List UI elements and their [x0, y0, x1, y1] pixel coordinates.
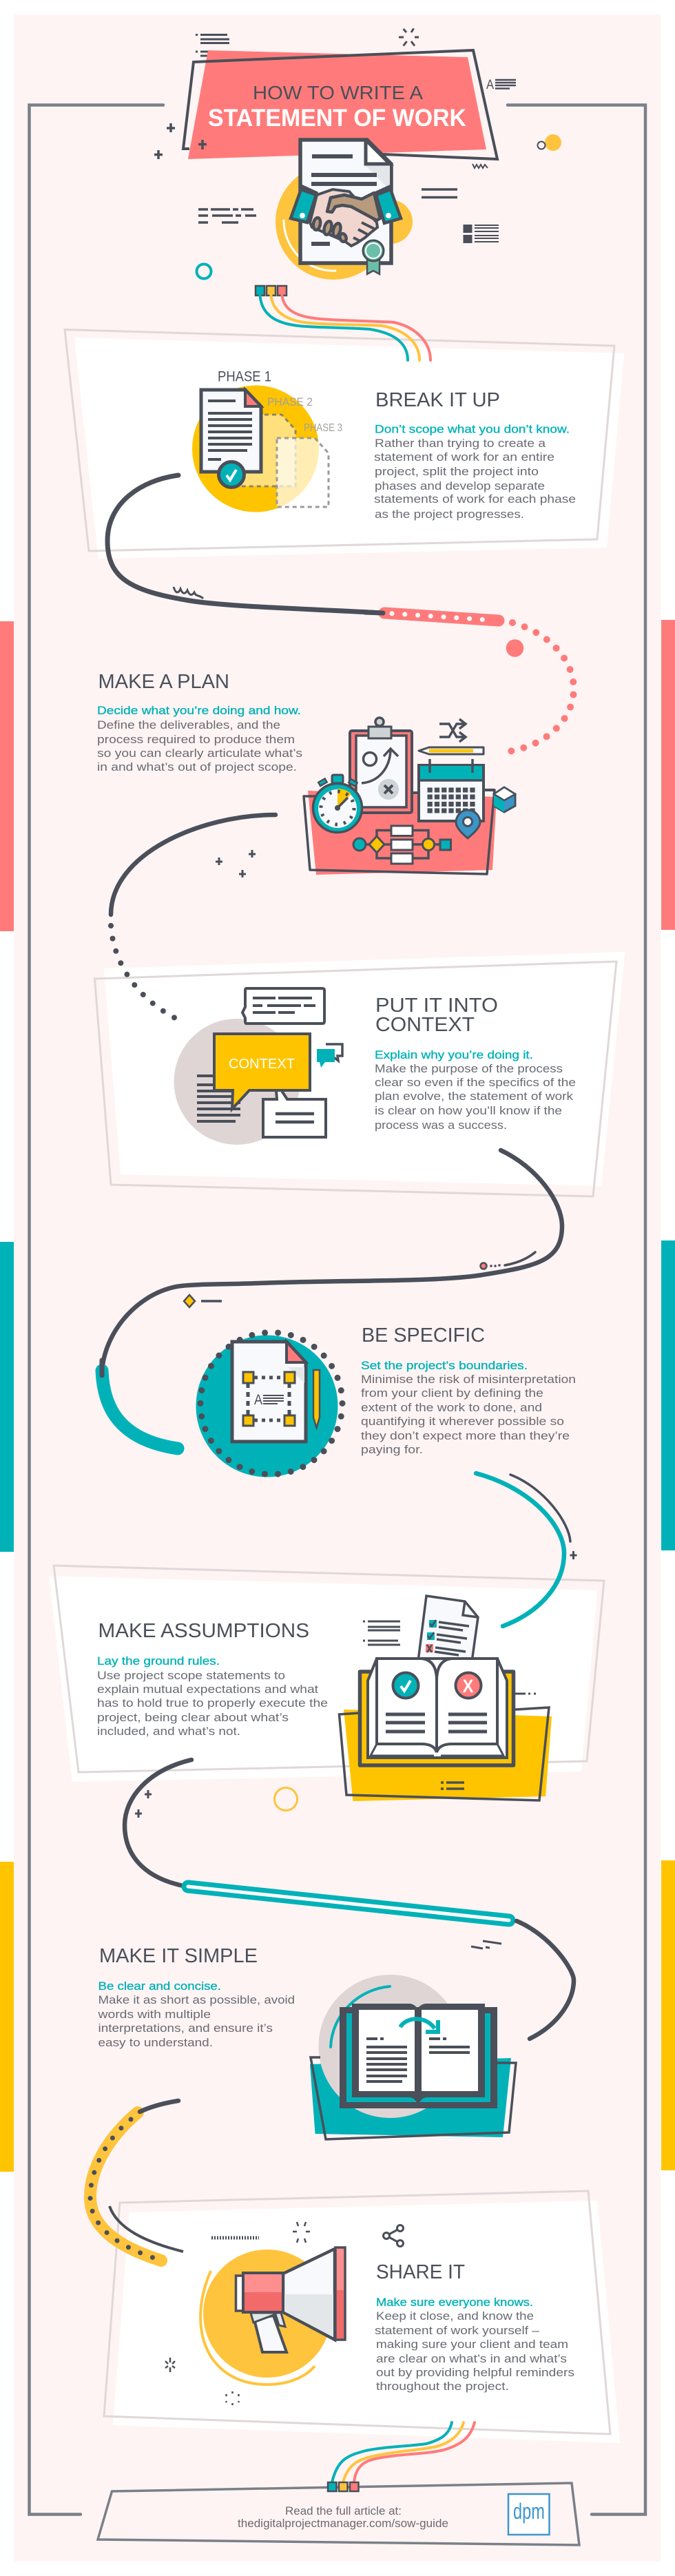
heading — [375, 995, 498, 1036]
wave mark — [174, 587, 203, 599]
text block: Set the project’s boundaries. — [361, 1359, 528, 1372]
teal arc — [476, 1473, 564, 1626]
thin dark arc — [110, 2206, 183, 2252]
heading: BREAK IT UP — [375, 389, 500, 411]
phase labels — [218, 369, 342, 434]
text block: explain mutual expectations and what — [97, 1683, 318, 1696]
phase labels: PHASE 2 — [267, 396, 313, 408]
logo — [508, 2494, 550, 2535]
text block: Lay the ground rules. — [97, 1654, 220, 1668]
connector curve 5 — [517, 1921, 574, 2039]
coral dotted curve — [509, 623, 574, 751]
connector curve 1 — [107, 475, 383, 613]
side band: yellow left — [0, 1862, 14, 2172]
letter A beside lines: A — [486, 78, 494, 92]
text block: extent of the work to done, and — [361, 1401, 542, 1414]
text block: statement of work yourself – — [375, 2324, 540, 2337]
text block: has to hold true to properly execute the — [97, 1696, 328, 1710]
text block: Be clear and concise. — [98, 1980, 221, 1993]
text block — [375, 2296, 574, 2393]
connector curve 4 — [125, 1760, 191, 1886]
text block: Rather than trying to create a — [375, 437, 546, 450]
cable connectors — [328, 2482, 358, 2491]
text block: in and what’s out of project scope. — [97, 760, 297, 773]
context label: CONTEXT — [229, 1057, 295, 1072]
text block: they don’t expect more than they’re — [361, 1429, 570, 1442]
yellow dotted band — [90, 2112, 161, 2261]
diamond with dash — [184, 1295, 222, 1307]
bottom cables — [332, 2422, 475, 2482]
text block: paying for. — [361, 1443, 423, 1456]
text block: as the project progresses. — [375, 508, 524, 521]
heading: MAKE A PLAN — [98, 671, 229, 693]
text block: Explain why you’re doing it. — [375, 1048, 533, 1061]
article link text: thedigitalprojectmanager.com/sow-guide — [238, 2517, 448, 2530]
text block — [361, 1359, 576, 1456]
text block: Use project scope statements to — [97, 1669, 285, 1682]
text block: from your client by defining the — [361, 1386, 543, 1400]
coral dot — [506, 639, 523, 657]
teal thick curve — [102, 1371, 178, 1448]
article link text: Read the full article at: — [285, 2504, 402, 2517]
text block: Make the purpose of the process — [375, 1062, 563, 1075]
text block: making sure your client and team — [376, 2338, 568, 2351]
header decoration icons — [154, 28, 561, 279]
panel: make assumptions — [49, 1566, 604, 1801]
coral connector bar — [365, 612, 499, 621]
text block: project, split the project into — [375, 465, 539, 478]
top cables — [256, 286, 430, 360]
text block: Decide what you’re doing and how. — [97, 704, 301, 717]
heading: SHARE IT — [376, 2261, 465, 2283]
panel: make it simple — [97, 1945, 516, 2139]
side band: coral right — [661, 620, 675, 930]
logo: dpm — [513, 2499, 545, 2524]
text block: Define the deliverables, and the — [97, 718, 280, 731]
text block: statements of work for each phase — [374, 492, 576, 506]
letter A in document: A — [254, 1392, 262, 1408]
icon: simple open book — [310, 1975, 516, 2139]
yellow ring — [274, 1788, 298, 1810]
phase labels: PHASE 1 — [218, 369, 271, 384]
panel: footer — [98, 2482, 579, 2545]
plus marks — [135, 1790, 152, 1818]
banner: coral shape — [188, 50, 486, 159]
panel: make a plan — [97, 671, 515, 875]
heading: BE SPECIFIC — [362, 1325, 485, 1347]
text block: Keep it close, and know the — [376, 2309, 534, 2323]
plus mark — [570, 1551, 577, 1559]
text block: process required to produce them — [97, 733, 295, 746]
icon: megaphone — [200, 2247, 345, 2385]
text block: words with multiple — [97, 2008, 211, 2021]
thin dark arc — [510, 1475, 570, 1541]
text block: throughout the project. — [376, 2380, 509, 2393]
text block — [97, 704, 302, 773]
small arc with dots — [481, 1252, 535, 1269]
card outline — [54, 1566, 604, 1772]
heading: PUT IT INTO — [375, 995, 498, 1017]
connector curve 2 — [111, 815, 276, 915]
card outline — [95, 962, 616, 1196]
icon: open book with checklist — [339, 1596, 552, 1801]
text block — [97, 1654, 328, 1738]
text block — [375, 1048, 576, 1132]
teal connector bar — [188, 1887, 509, 1920]
dark dotted curve — [111, 926, 176, 1019]
card outline — [104, 2191, 610, 2434]
dotted dash — [211, 2236, 259, 2240]
connector curve 3 — [102, 1150, 562, 1375]
icon: project phases — [192, 386, 329, 512]
dark curve end — [99, 1360, 105, 1375]
X mark in circle: X — [463, 1676, 474, 1696]
title line one: HOW TO WRITE A — [253, 82, 423, 103]
text block: Make sure everyone knows. — [376, 2296, 533, 2309]
text block: Minimise the risk of misinterpretation — [361, 1373, 576, 1386]
card background — [74, 337, 624, 559]
icon: planning tools — [304, 718, 515, 875]
heading: MAKE IT SIMPLE — [99, 1945, 258, 1967]
text block: included, and what’s not. — [97, 1725, 240, 1738]
text block: Don’t scope what you don’t know. — [375, 423, 570, 435]
star mark — [293, 2222, 310, 2243]
text block: so you can clearly articulate what’s — [97, 747, 302, 760]
icon: contract and handshake — [276, 140, 413, 280]
heading: MAKE ASSUMPTIONS — [98, 1620, 309, 1642]
text block: interpretations, and ensure it’s — [98, 2022, 273, 2035]
text block: phases and develop separate — [375, 479, 545, 492]
dark curve stub — [140, 2101, 178, 2112]
text block: plan evolve, the statement of work — [375, 1090, 574, 1103]
text block: easy to understand. — [98, 2036, 213, 2049]
panel: put it into context — [95, 952, 625, 1196]
icon: context speech bubbles — [174, 988, 342, 1145]
footer outline — [98, 2483, 579, 2545]
text block — [374, 423, 576, 521]
spark marks — [165, 2358, 239, 2405]
plus marks — [216, 850, 256, 877]
side band: coral left — [0, 621, 14, 931]
text block: out by providing helpful reminders — [376, 2366, 574, 2379]
text block: process was a success. — [375, 1119, 507, 1132]
text block: clear so even if the specifics of the — [375, 1076, 576, 1089]
text block: is clear on how you’ll know if the — [375, 1104, 562, 1117]
title banner — [183, 50, 497, 159]
side band: teal right — [661, 1240, 675, 1550]
side band: teal left — [0, 1242, 14, 1552]
panel: share it — [104, 2191, 620, 2443]
small dashes — [471, 1941, 501, 1949]
phase labels: PHASE 3 — [304, 422, 342, 434]
text block — [97, 1980, 295, 2049]
icon: bounded document — [196, 1332, 342, 1477]
text block: statement of work for an entire — [374, 450, 554, 464]
text block: Make it as short as possible, avoid — [98, 1993, 295, 2006]
card background — [49, 1576, 598, 1782]
card outline — [65, 329, 614, 551]
banner: outline — [183, 50, 497, 159]
icon: share — [383, 2225, 404, 2247]
text block: project, being clear about what’s — [97, 1711, 289, 1724]
card background — [104, 952, 625, 1186]
panel: break it up — [65, 329, 624, 559]
card background — [113, 2201, 620, 2443]
heading: CONTEXT — [375, 1014, 475, 1036]
text block: are clear on what’s in and what’s — [376, 2352, 567, 2365]
title line two: STATEMENT OF WORK — [208, 105, 466, 132]
text block: quantifying it wherever possible so — [361, 1415, 564, 1428]
article link text — [238, 2504, 448, 2530]
plus mark on banner — [198, 140, 207, 149]
side band: yellow right — [661, 1860, 675, 2170]
panel: be specific — [196, 1325, 576, 1477]
